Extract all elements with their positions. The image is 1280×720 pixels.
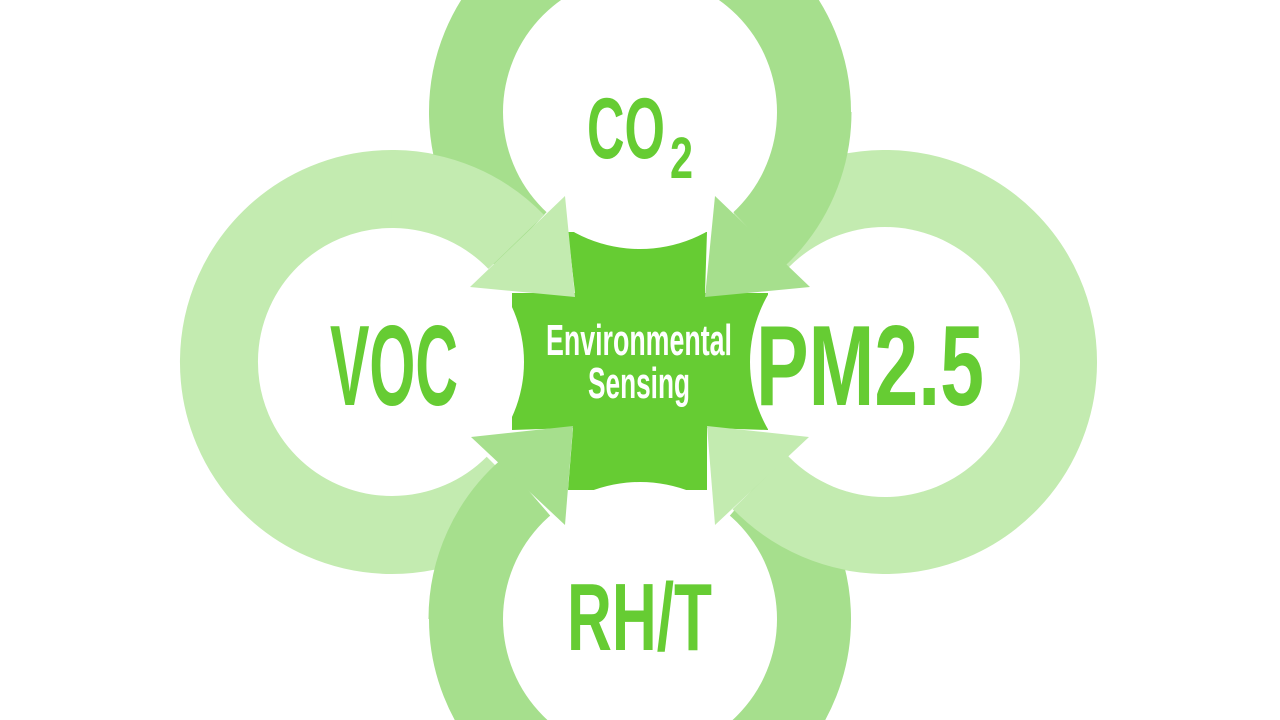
circle: VOC [260, 230, 524, 494]
circle: PM2.5 [750, 227, 1020, 497]
arrow: top-left [470, 196, 575, 297]
label: CO2: CO [587, 81, 665, 177]
arrow: top-right [705, 196, 810, 297]
label: RH/T: RH/T [567, 564, 712, 671]
label: VOC: VOC [330, 303, 458, 430]
label: PM2.5: PM2.5 [756, 303, 984, 430]
ring: RH/T [467, 488, 813, 720]
label: CO2: 2 [670, 126, 693, 191]
ring: CO2 [467, 0, 813, 238]
center label: Sensing [588, 359, 690, 408]
center hub [512, 232, 768, 490]
ring: PM2.5 [761, 189, 1058, 535]
circle: CO2 [503, 0, 777, 249]
ring heads [392, 112, 885, 619]
circle: RH/T [503, 482, 777, 720]
center label [546, 316, 732, 408]
arrow: bottom-right [707, 426, 809, 525]
ring: VOC [219, 189, 516, 535]
center label: Environmental [546, 316, 732, 365]
arrow: bottom-left [471, 426, 573, 525]
